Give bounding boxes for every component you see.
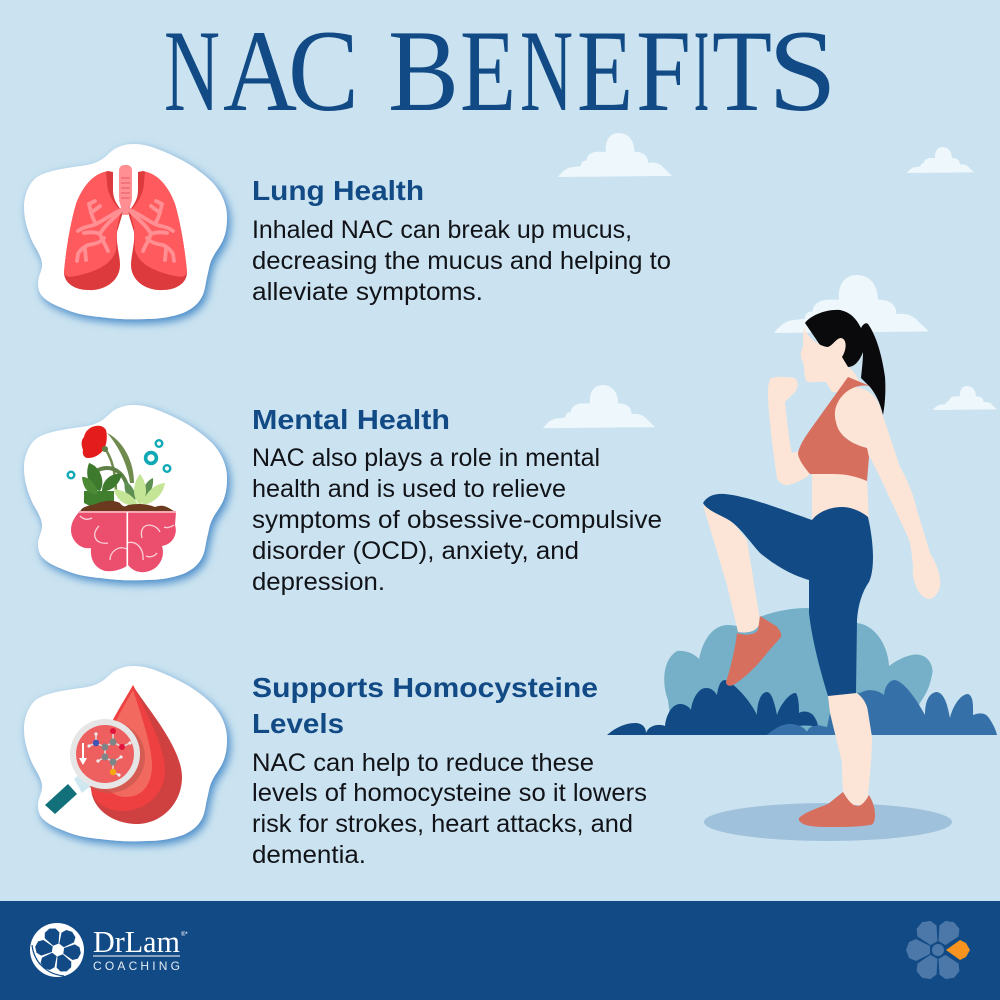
text block: homocysteine: Supports Homocysteine	[252, 672, 598, 703]
clouds	[543, 133, 997, 428]
standing shoe	[799, 792, 875, 827]
icon: flower mark	[906, 917, 970, 983]
text block: mental health	[252, 404, 662, 596]
title: C	[288, 7, 359, 136]
top	[798, 377, 870, 481]
title: N	[520, 7, 573, 136]
panel: homocysteine icon	[24, 666, 227, 841]
bushes	[607, 608, 997, 735]
text block: mental health: depression.	[252, 568, 385, 596]
text block: mental health: disorder (OCD), anxiety, and	[252, 537, 579, 565]
front arm	[768, 377, 812, 485]
logo: DrLam Coaching: DrLam	[93, 924, 180, 959]
title: A	[223, 7, 297, 136]
text block: homocysteine	[252, 672, 647, 869]
title: I	[694, 7, 709, 136]
raised lower leg	[703, 505, 760, 632]
text block: homocysteine: Levels	[252, 708, 344, 739]
text block: lung health: decreasing the mucus and helping to	[252, 247, 671, 275]
text block: homocysteine: NAC can help to reduce these	[252, 749, 594, 777]
torso	[812, 470, 869, 525]
text block: mental health: Mental Health	[252, 404, 450, 435]
logo: DrLam Coaching	[30, 923, 188, 977]
title: E	[577, 7, 633, 136]
text block: homocysteine: risk for strokes, heart attacks, and	[252, 810, 633, 838]
hair	[805, 310, 885, 415]
shorts	[703, 494, 873, 696]
figure: runner	[703, 310, 940, 827]
logo: DrLam Coaching: ®*	[181, 931, 188, 938]
panel: mental health icon	[24, 405, 227, 580]
title: B	[388, 7, 459, 136]
standing leg	[828, 693, 872, 806]
title: T	[712, 7, 772, 136]
text block: homocysteine: dementia.	[252, 841, 366, 869]
footer bar	[0, 901, 1000, 1000]
icon: brain with plant	[68, 426, 176, 572]
title: E	[460, 7, 516, 136]
title: N	[164, 7, 220, 136]
ground shadow	[704, 803, 952, 841]
icon: lungs	[64, 165, 187, 290]
back arm	[834, 387, 940, 599]
panel: lung health icon	[24, 144, 227, 319]
text block: mental health: symptoms of obsessive-compulsive	[252, 506, 662, 534]
title	[164, 7, 837, 136]
logo: DrLam Coaching: COACHING	[93, 959, 180, 973]
title: F	[636, 7, 691, 136]
text block: lung health: Lung Health	[252, 175, 424, 206]
text block: lung health: alleviate symptoms.	[252, 278, 483, 306]
text block: lung health	[252, 175, 671, 306]
molecule	[87, 728, 132, 777]
text block: mental health: NAC also plays a role in mental	[252, 444, 600, 472]
icon: blood drop with magnifier	[45, 685, 182, 824]
text block: lung health: Inhaled NAC can break up mucus,	[252, 216, 632, 244]
head and neck	[801, 327, 860, 392]
title: S	[768, 7, 837, 136]
text block: homocysteine: levels of homocysteine so it lowers	[252, 779, 647, 807]
text block: mental health: health and is used to relieve	[252, 475, 566, 503]
raised shoe	[726, 616, 781, 686]
